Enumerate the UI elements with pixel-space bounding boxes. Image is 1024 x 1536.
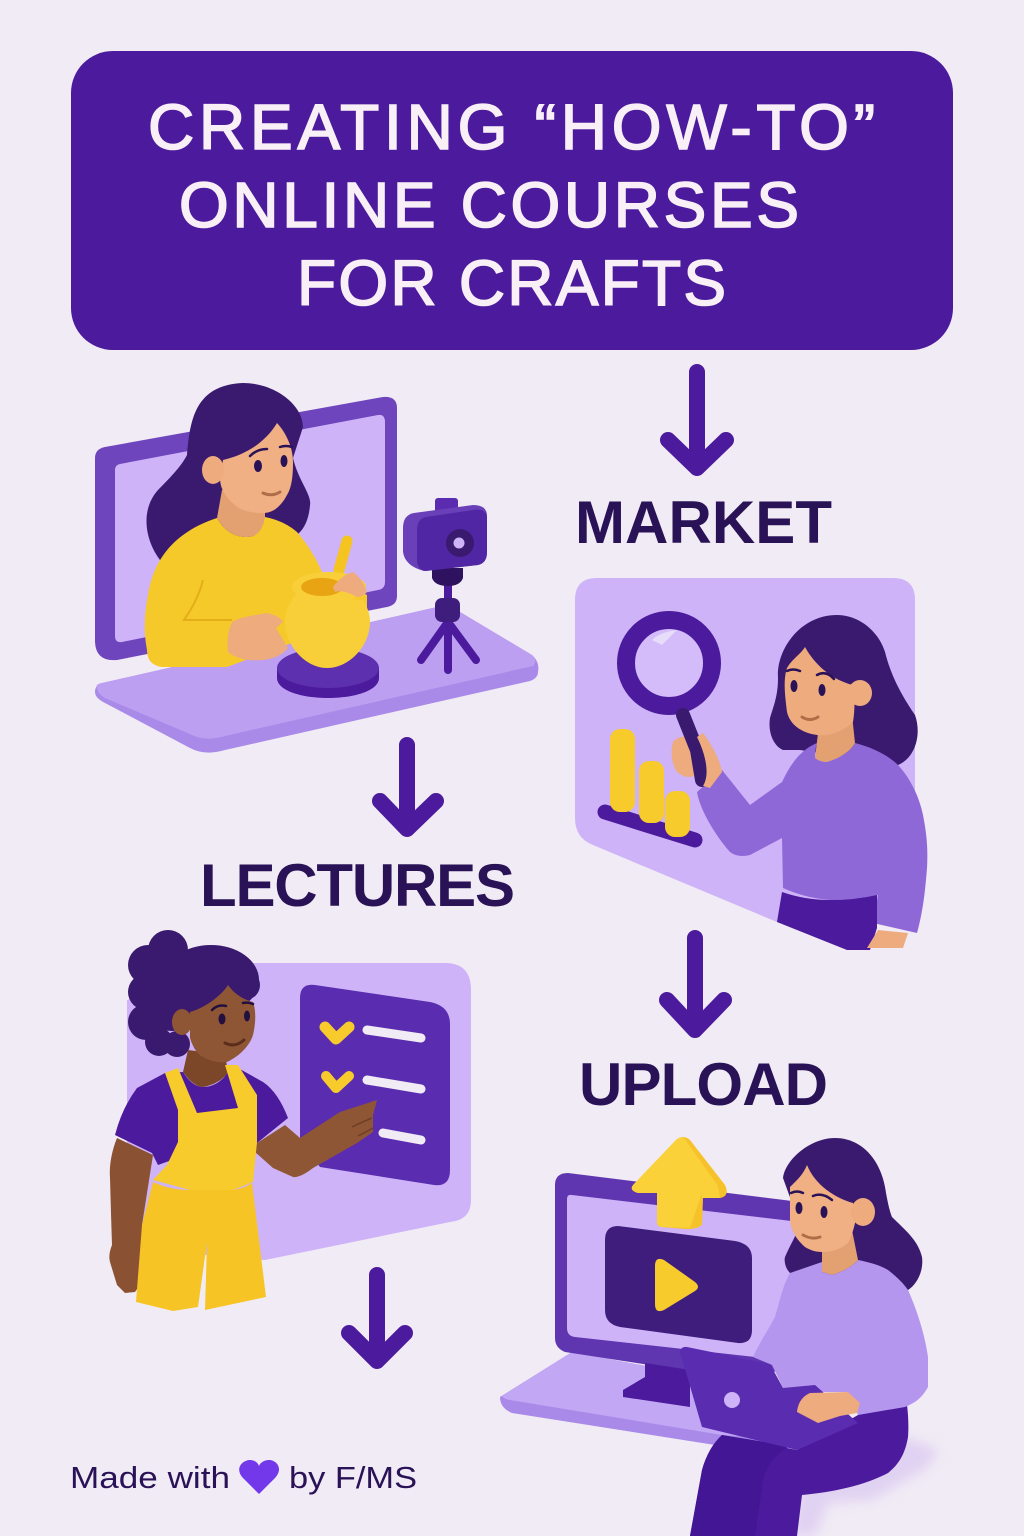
title text: FOR CRAFTS (297, 247, 726, 319)
title text: ONLINE COURSES (179, 169, 799, 241)
heading: upload: UPLOAD (579, 1051, 828, 1118)
footer credit: Made with (70, 1460, 230, 1495)
right arm (255, 1100, 377, 1177)
monitor (555, 1173, 800, 1407)
upload woman trousers (690, 1395, 908, 1536)
title text (148, 91, 875, 319)
panel: lectures illustration (109, 930, 471, 1311)
hands (228, 613, 288, 660)
footer credit: by F/MS (289, 1460, 417, 1495)
pot (285, 572, 370, 668)
upload arrow (632, 1137, 727, 1229)
thumb (697, 733, 722, 788)
magnifying glass (626, 620, 712, 706)
bar chart (605, 729, 695, 840)
handle (683, 715, 702, 780)
upload woman sweater (753, 1260, 928, 1415)
left arm (109, 1138, 153, 1293)
shadow (790, 1436, 938, 1536)
arrow: market to upload (667, 938, 724, 1030)
illustration: upload (500, 1137, 938, 1536)
checklist board (300, 985, 450, 1185)
heading: market: MARKET (575, 489, 832, 556)
icon: heart (239, 1460, 279, 1494)
arrow: creator to lectures (380, 745, 436, 829)
title banner (71, 51, 953, 350)
market woman sweater (697, 743, 927, 933)
overalls shorts (136, 1182, 266, 1311)
title text: CREATING “HOW-TO” (148, 91, 875, 163)
sweater (145, 517, 367, 667)
neck (217, 490, 265, 537)
desk (500, 1352, 800, 1445)
woman: upload (680, 1138, 928, 1536)
woman hair (146, 383, 310, 560)
arrow: lectures to next (349, 1275, 405, 1361)
monitor (95, 397, 397, 660)
arrow: title to market (668, 372, 726, 468)
monitor stand (623, 1363, 690, 1407)
video player (605, 1226, 752, 1343)
pottery wheel (277, 648, 379, 698)
play icon (655, 1259, 698, 1311)
illustration: creator filming pottery (95, 383, 538, 753)
panel: market research illustration (575, 578, 927, 950)
overalls bib (153, 1065, 257, 1190)
market woman trousers (777, 892, 877, 950)
shirt (115, 1068, 288, 1165)
upload woman hand (797, 1392, 860, 1423)
market woman lower hand (867, 930, 908, 948)
woman: market (672, 615, 927, 950)
face (220, 423, 293, 513)
curly bun (128, 930, 260, 1057)
footer credit (70, 1460, 417, 1495)
fingers (672, 736, 698, 777)
desk (95, 607, 538, 753)
woman: lectures (109, 930, 377, 1311)
laptop (680, 1347, 858, 1450)
camera on tripod (403, 498, 487, 670)
heading: lectures: LECTURES (200, 852, 515, 919)
tool (339, 541, 347, 570)
